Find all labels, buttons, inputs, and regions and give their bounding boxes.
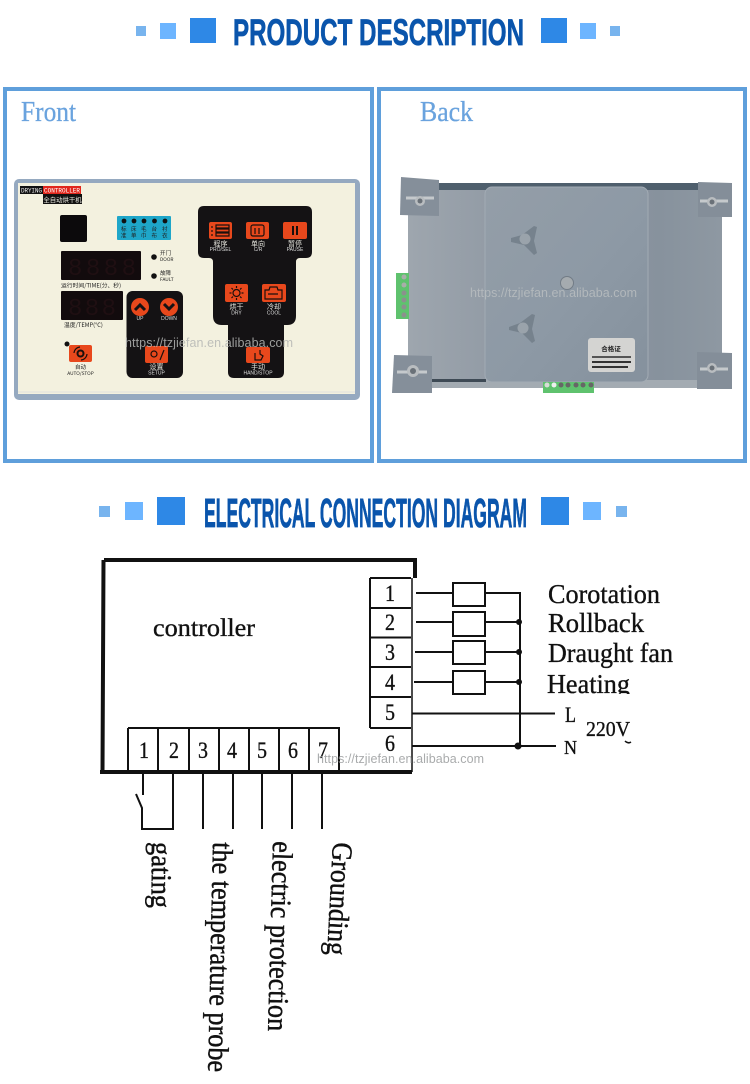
green terminals left	[396, 273, 409, 319]
program indicators: 毛	[141, 225, 147, 233]
program indicators: 单	[131, 232, 137, 240]
right terminal numbers: 1	[385, 581, 395, 606]
panel: back photo	[379, 89, 745, 461]
label: controller: controller	[153, 615, 256, 642]
label: Front: Front	[21, 97, 76, 128]
watermark: https://tzjiefan.en.alibaba.com	[125, 336, 293, 350]
button labels: 单向	[251, 239, 265, 249]
logo: DRYING	[21, 188, 42, 194]
black keypad left	[126, 291, 183, 378]
button labels: DRY	[231, 310, 242, 316]
output labels: Corotation	[548, 579, 660, 609]
controller back housing	[392, 177, 732, 393]
program indicators: 准	[121, 232, 127, 240]
right terminal numbers: 3	[385, 640, 395, 665]
program indicators: 巾	[141, 232, 147, 240]
right terminal numbers: 2	[385, 610, 395, 635]
green terminals bottom	[543, 382, 594, 393]
program indicators: 布	[152, 232, 158, 240]
button labels: DOWN	[161, 316, 177, 322]
button labels: 自动	[75, 363, 86, 371]
buttons	[69, 222, 307, 363]
time display	[61, 251, 141, 290]
bottom terminal numbers: 6	[288, 738, 298, 763]
door and fault lights: DOOR	[160, 256, 173, 263]
watermark: https://tzjiefan.en.alibaba.com	[317, 752, 484, 766]
bottom terminal numbers: 7	[318, 738, 328, 763]
right terminal numbers	[385, 581, 395, 756]
door and fault lights: 故障	[160, 269, 172, 277]
button labels: 暂停	[288, 239, 302, 249]
door and fault lights: FAULT	[160, 276, 174, 283]
program indicators: 衣	[162, 232, 168, 240]
button labels: C/R	[254, 247, 263, 253]
logo: CONTROLLER	[44, 188, 80, 194]
rotated labels: Grounding	[320, 842, 358, 956]
power labels: 220V	[586, 717, 630, 741]
button labels: 冷却	[267, 302, 281, 312]
door and fault lights: 开门	[160, 249, 171, 257]
program indicators: 标	[121, 225, 127, 233]
heading: electrical connection diagram	[99, 490, 627, 536]
time display: 8888	[68, 256, 136, 283]
bottom terminal numbers: 5	[257, 738, 267, 763]
heading: product description: PRODUCT DESCRIPTION	[233, 11, 524, 53]
button labels	[64, 239, 304, 377]
button labels: 烘干	[230, 302, 244, 312]
bottom terminal numbers: 1	[139, 738, 149, 763]
bottom terminal numbers: 3	[198, 738, 208, 763]
logo	[20, 186, 82, 204]
controller box	[100, 560, 415, 772]
mounting brackets	[392, 177, 732, 393]
bottom terminal numbers	[139, 738, 328, 763]
button labels: PRO/SEL	[210, 247, 232, 253]
button labels: AUTO/STOP	[67, 370, 94, 377]
button glyphs	[74, 225, 297, 360]
sensor wires and switch	[136, 774, 322, 829]
right terminal numbers: 5	[385, 700, 395, 725]
power labels: L	[565, 702, 576, 727]
bottom terminal numbers: 4	[227, 738, 237, 763]
right terminal numbers: 6	[385, 731, 395, 756]
power labels	[564, 702, 631, 759]
temperature display	[61, 291, 123, 329]
door and fault lights	[151, 249, 174, 283]
rotated labels: electric protection	[261, 841, 298, 1032]
label: Back: Back	[420, 97, 473, 128]
button labels: SETUP	[148, 370, 165, 376]
program indicators: 台	[152, 225, 158, 233]
button labels: UP	[137, 316, 144, 322]
button labels: COOL	[267, 310, 281, 316]
power labels: N	[564, 737, 577, 759]
program indicators	[117, 216, 171, 240]
controller front panel	[14, 179, 360, 400]
black keypad right	[198, 206, 312, 378]
button labels: PAUSE	[287, 247, 304, 253]
button labels: HAND/STOP	[243, 370, 273, 376]
program indicators: 衬	[162, 225, 168, 233]
button labels: 手动	[251, 362, 265, 372]
wiring diagram	[100, 560, 673, 1072]
small display	[60, 215, 87, 242]
output labels	[545, 579, 673, 702]
button labels: 设置	[150, 362, 164, 372]
wing knobs	[509, 226, 574, 343]
watermark: https://tzjiefan.en.alibaba.com	[470, 286, 637, 300]
logo: 全自动烘干机	[43, 195, 82, 204]
junction dots	[514, 619, 522, 750]
output labels: Heating	[547, 669, 630, 699]
rotated labels: gating	[144, 842, 177, 908]
output labels: Draught fan	[548, 638, 673, 668]
panel: front photo	[5, 89, 372, 461]
time display: 运行时间/TIME(分、秒)	[61, 280, 121, 290]
temperature display: 888	[68, 296, 116, 323]
bottom terminal numbers: 2	[169, 738, 179, 763]
certificate label	[588, 338, 635, 372]
program indicators: 床	[131, 225, 137, 233]
load wiring	[412, 583, 556, 746]
certificate label: 合格证	[601, 343, 621, 353]
right terminal numbers: 4	[385, 670, 395, 695]
temperature display: 温度/TEMP(℃)	[64, 320, 103, 329]
rotated labels	[144, 841, 358, 1072]
button labels: 程序	[214, 239, 228, 249]
output labels: Rollback	[548, 608, 644, 638]
